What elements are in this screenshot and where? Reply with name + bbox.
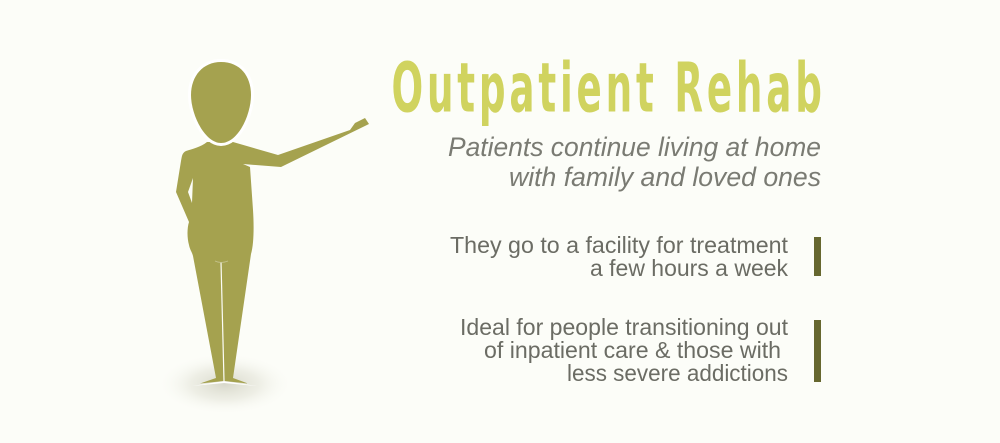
- leg divider: [221, 262, 224, 381]
- foot highlight: [192, 381, 257, 386]
- figure: person pointing: [157, 62, 369, 415]
- point: ideal candidates: [460, 314, 821, 386]
- point: facility treatment: [450, 232, 821, 281]
- point text: less severe addictions: [567, 360, 788, 386]
- point text: They go to a facility for treatment: [450, 232, 789, 258]
- point text: [450, 232, 789, 281]
- point bar: [814, 320, 821, 382]
- ground shadow: [157, 353, 293, 415]
- head: [191, 62, 251, 143]
- subtitle: with family and loved ones: [509, 162, 821, 192]
- point bar: [814, 237, 821, 276]
- point text: a few hours a week: [590, 255, 788, 281]
- point text: of inpatient care & those with: [484, 337, 781, 363]
- body with pointing arm: [176, 118, 369, 384]
- point text: [460, 314, 789, 386]
- subtitle: Patients continue living at home: [448, 132, 821, 162]
- subtitle: [448, 132, 821, 192]
- point text: Ideal for people transitioning out: [460, 314, 789, 340]
- title: Outpatient Rehab: [392, 49, 822, 129]
